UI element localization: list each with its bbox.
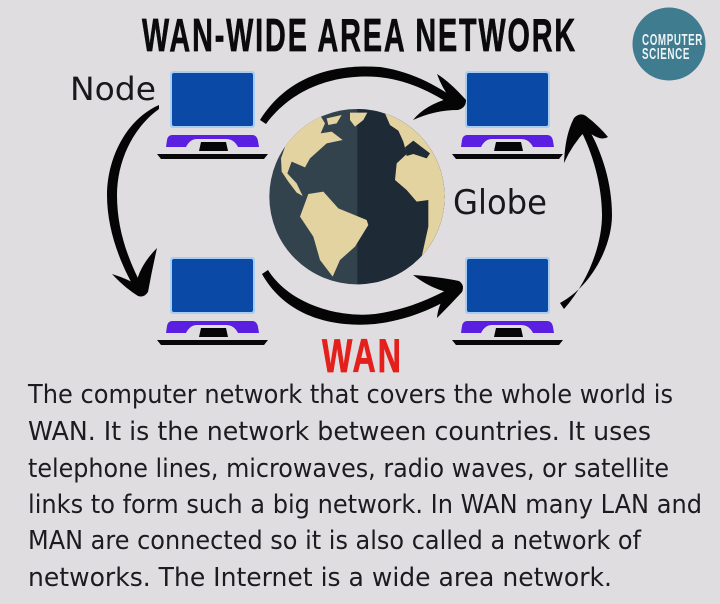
badge: computer science — [632, 8, 706, 80]
text block: description: telephone lines, microwaves, radio waves, or satellite — [28, 454, 669, 484]
arrow: bottom — [262, 270, 463, 325]
label: node: Node — [70, 70, 156, 108]
laptop: bottom right — [452, 257, 563, 345]
text block: description: WAN. It is the network between countries. It uses — [28, 417, 651, 447]
laptop: top left — [157, 71, 268, 159]
text block: description: The computer network that covers the whole world is — [27, 380, 673, 410]
text block: description: MAN are connected so it is also called a network of — [28, 526, 642, 556]
arrow: top — [260, 66, 466, 124]
laptop: bottom left — [157, 257, 268, 345]
text block: description: networks. The Internet is a wide area network. — [28, 563, 612, 593]
badge: computer science: SCIENCE — [642, 46, 690, 63]
laptop: top right — [452, 71, 563, 159]
icon: globe — [269, 109, 445, 284]
label: wan: WAN — [322, 329, 403, 382]
arrow: right — [560, 114, 612, 309]
arrow: left — [107, 105, 159, 296]
label: globe: Globe — [453, 183, 547, 223]
text block: description — [27, 380, 702, 593]
